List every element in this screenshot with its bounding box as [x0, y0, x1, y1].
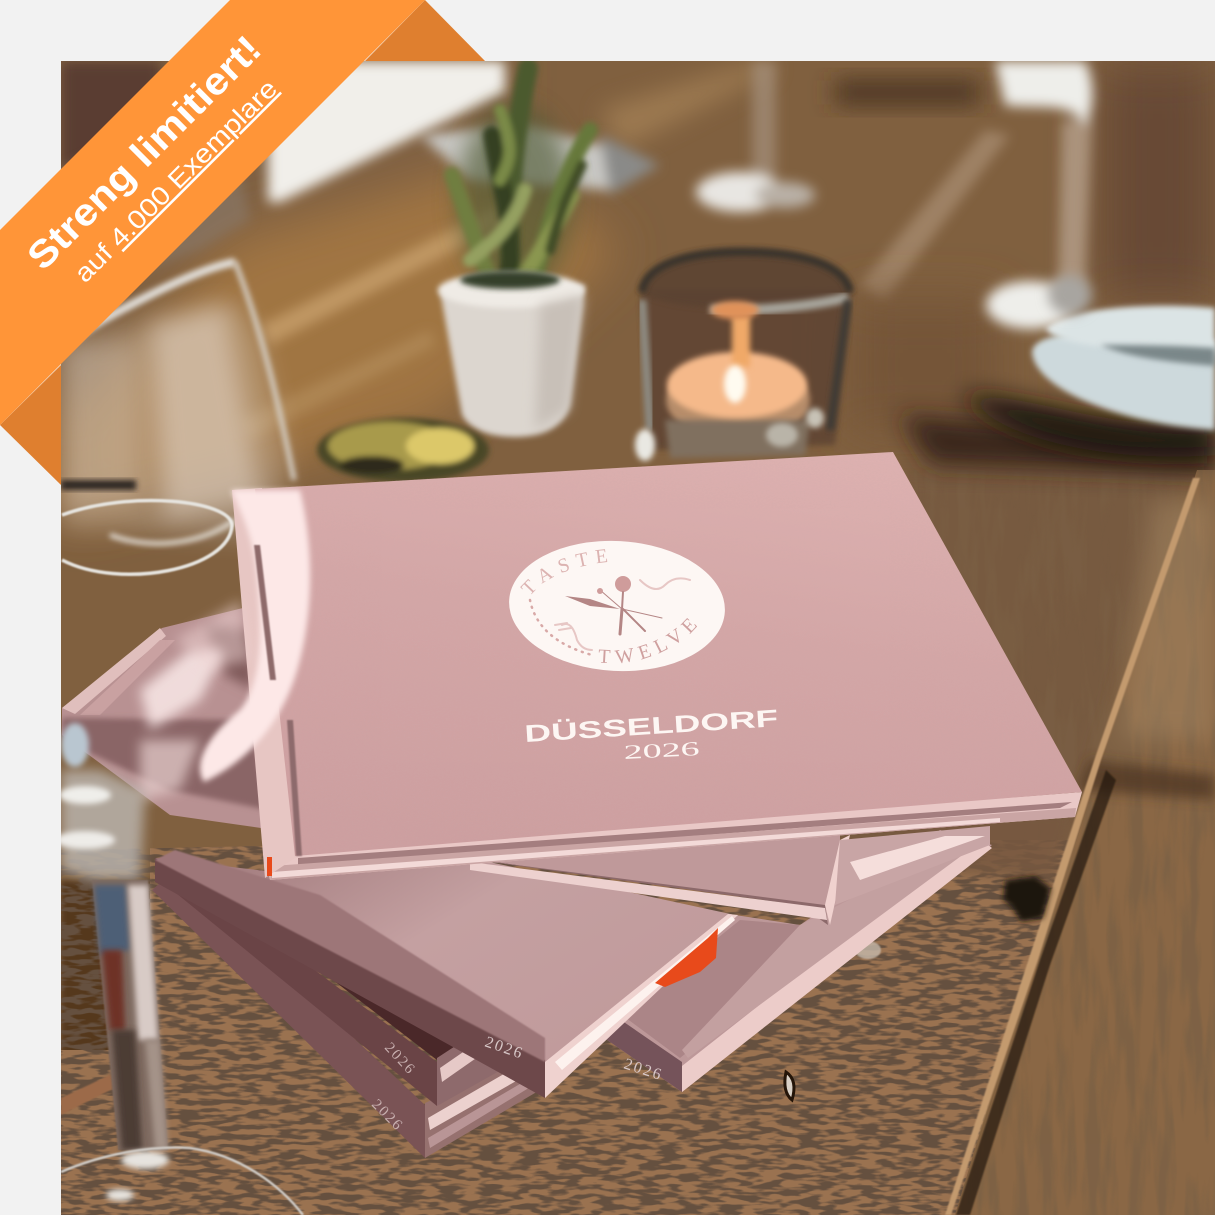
tin on table — [317, 418, 489, 482]
ribbon subline: auf 4.000 Exemplare — [68, 73, 283, 288]
cutlery icon — [565, 576, 662, 634]
ribbon fold bottom left — [0, 365, 61, 485]
bright reflection on the book — [200, 490, 310, 782]
nail hole — [785, 1072, 794, 1100]
wine glass centre top — [696, 61, 815, 212]
top book Düsseldorf — [232, 452, 1082, 880]
wine glass upper left — [61, 61, 294, 574]
front cover — [255, 452, 1082, 856]
year on spine: 2026 — [381, 1040, 419, 1079]
year on spine: 2026 — [622, 1056, 665, 1084]
ribbon fold top right — [365, 0, 485, 61]
lower plank with dark grain — [61, 810, 1081, 1215]
year on spine: 2026 — [483, 1034, 526, 1063]
page block and lower cover — [265, 792, 1082, 880]
white box background top — [268, 61, 505, 202]
plate at right — [960, 275, 1215, 457]
knot in wood — [1003, 876, 1051, 922]
ribbon headline: Streng limitiert! — [20, 28, 270, 278]
central book with bookmark — [155, 850, 738, 1098]
plank seam — [945, 478, 1200, 1215]
spine of top book — [232, 488, 298, 878]
badge wording bottom: TWELVE — [598, 618, 697, 664]
ribbon band — [0, 0, 425, 425]
orange page marker — [267, 857, 272, 876]
logo badge — [509, 540, 725, 672]
stem — [92, 880, 168, 1150]
year on spine: 2026 — [368, 1097, 406, 1135]
left books behind glass — [62, 605, 275, 830]
ribbon: limited edition — [0, 0, 485, 485]
floral flourishes — [555, 578, 690, 650]
spine groove — [287, 720, 302, 856]
plant in white pot — [438, 68, 590, 437]
chipped spot — [855, 941, 881, 959]
year: 2026 — [623, 738, 700, 764]
bottom book: spine with year — [152, 870, 540, 1158]
city name: DÜSSELDORF — [524, 705, 779, 748]
third book: spine with year — [180, 870, 496, 1106]
orange bookmark — [655, 928, 718, 987]
mid plank — [840, 482, 1166, 840]
right lower book — [600, 830, 992, 1092]
glass foot — [61, 1147, 303, 1215]
plate blurred at top — [420, 125, 660, 195]
wine glass foreground — [55, 490, 310, 1215]
dotted decoration — [530, 600, 592, 655]
right plank — [955, 470, 1215, 1215]
stem knop — [61, 770, 145, 880]
candle in glass — [635, 248, 852, 461]
badge wording top: TASTE — [520, 549, 608, 594]
wine glass top right — [995, 61, 1092, 290]
second book under top — [440, 825, 990, 925]
